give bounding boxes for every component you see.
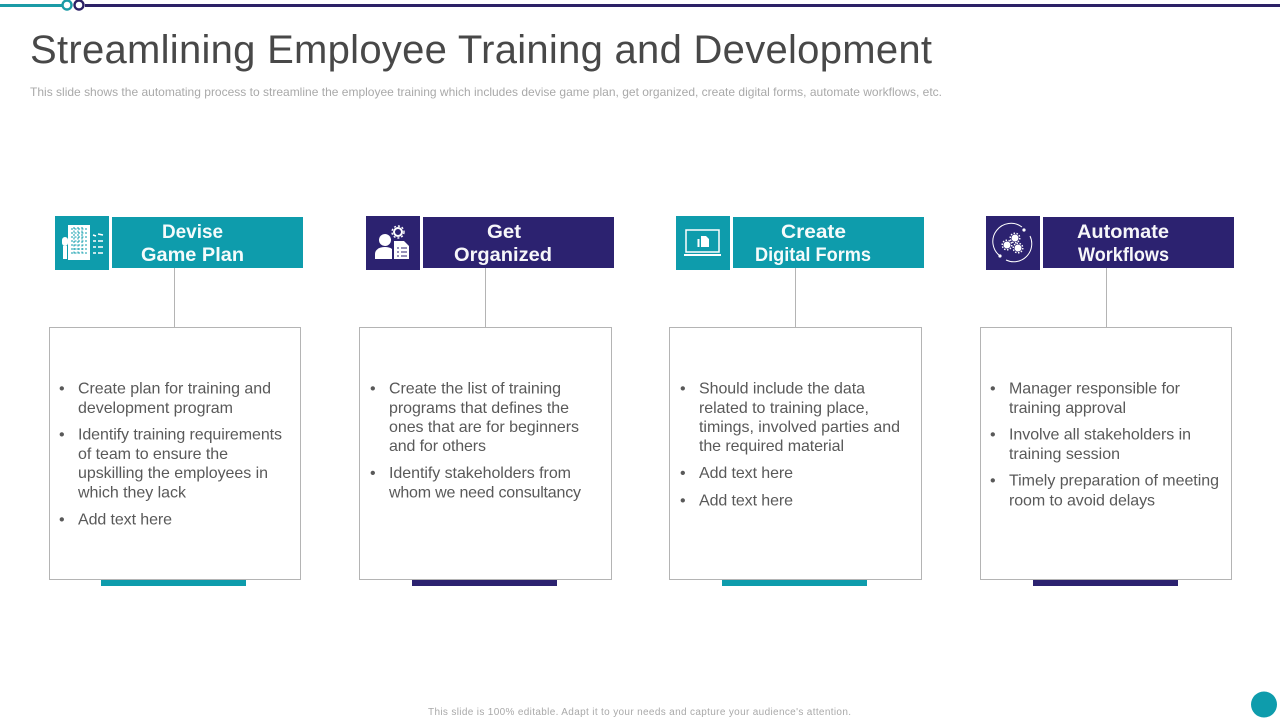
bullet list: Add text here <box>699 492 793 510</box>
panel: get organized <box>360 216 614 586</box>
bullet list: ones that are for beginners <box>389 419 579 436</box>
bullet list: • <box>990 380 996 398</box>
bullet list <box>370 380 581 502</box>
bullet list: timings, involved parties and <box>699 419 900 436</box>
bullet list: upskilling the employees in <box>78 465 268 482</box>
bullet list: • <box>59 512 65 528</box>
bullet list: Involve all stakeholders in <box>1009 427 1191 444</box>
top progress line <box>0 0 1280 10</box>
heading bar <box>733 217 924 268</box>
panel: automate workflows <box>980 216 1234 586</box>
bullet list: development program <box>78 400 233 417</box>
bullet list <box>990 380 1219 510</box>
heading bar: Create <box>781 221 846 243</box>
panel: create digital forms <box>670 216 924 586</box>
bullet list: • <box>59 380 65 398</box>
heading bar: Digital Forms <box>755 244 871 266</box>
heading bar: Workflows <box>1078 244 1169 266</box>
bullet list: • <box>370 380 376 398</box>
heading bar <box>1043 217 1234 268</box>
icon: game plan board <box>55 216 109 270</box>
subtitle: This slide shows the automating process to streamline the employee training which includes devise game plan, get organized, create digital forms, automate workflows, etc. <box>30 85 942 99</box>
bullet list: training approval <box>1009 400 1126 417</box>
heading bar: Game Plan <box>141 244 244 266</box>
bullet list: Identify training requirements <box>78 427 282 444</box>
title: Streamlining Employee Training and Development <box>30 28 932 72</box>
icon: laptop with document <box>676 216 730 270</box>
bullet list: • <box>59 427 65 444</box>
bullet list: related to training place, <box>699 400 869 417</box>
bullet list: • <box>680 380 686 398</box>
bullet list: • <box>370 465 376 482</box>
bullet list: Manager responsible for <box>1009 380 1181 398</box>
bullet list: whom we need consultancy <box>388 484 581 502</box>
card <box>360 328 612 586</box>
bullet list <box>680 380 900 510</box>
bullet list: • <box>680 465 686 482</box>
bullet list: training session <box>1009 446 1120 463</box>
icon: gears in orbit <box>986 216 1040 270</box>
card <box>670 328 922 586</box>
bullet list: • <box>990 427 996 444</box>
icon: person with gear and checklist <box>366 216 420 270</box>
bullet list: Add text here <box>699 465 793 482</box>
heading bar: Organized <box>454 244 552 266</box>
bullet list: the required material <box>699 438 844 455</box>
bullet list: Identify stakeholders from <box>389 465 571 482</box>
bullet list: which they lack <box>77 484 187 502</box>
card <box>50 328 300 586</box>
bullet list: of team to ensure the <box>78 446 228 463</box>
heading bar: Get <box>487 221 522 243</box>
panel: devise game plan <box>50 216 303 586</box>
footer note: This slide is 100% editable. Adapt it to your needs and capture your audience's attention. <box>428 707 851 718</box>
heading bar: Automate <box>1077 221 1169 243</box>
bullet list: Add text here <box>78 512 172 528</box>
corner circle <box>1251 692 1277 718</box>
bullet list: programs that defines the <box>389 400 569 417</box>
bullet list: Create the list of training <box>389 380 561 398</box>
heading bar <box>112 217 303 268</box>
bullet list <box>59 380 282 528</box>
bullet list: • <box>680 492 686 510</box>
bullet list: • <box>990 472 996 490</box>
bullet list: and for others <box>389 438 486 455</box>
card <box>980 328 1232 586</box>
bullet list: room to avoid delays <box>1009 492 1155 510</box>
bullet list: Timely preparation of meeting <box>1009 472 1219 490</box>
bullet list: Create plan for training and <box>78 380 271 398</box>
heading bar: Devise <box>162 221 223 243</box>
bullet list: Should include the data <box>699 380 865 398</box>
heading bar <box>423 217 614 268</box>
